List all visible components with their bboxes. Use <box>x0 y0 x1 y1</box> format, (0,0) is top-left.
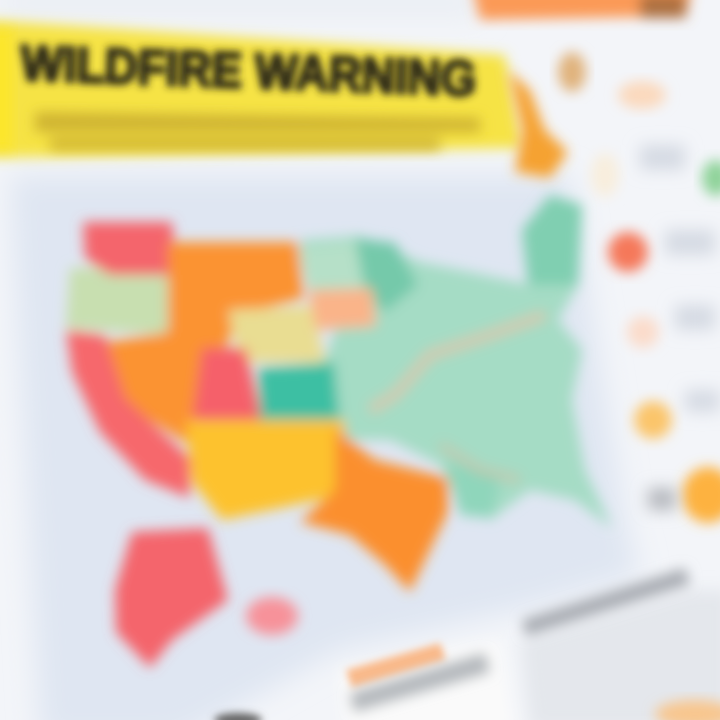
panel orange accent <box>655 700 720 720</box>
legend icon: green <box>702 160 720 196</box>
banner corner ribbon <box>508 70 568 178</box>
legend labels <box>640 145 720 510</box>
Texas <box>300 428 448 592</box>
eastern states base <box>300 195 612 528</box>
route line along the south <box>440 445 520 480</box>
Oregon <box>66 268 172 335</box>
card background <box>340 640 515 720</box>
northern plains light <box>298 243 365 292</box>
top orange banner <box>472 0 692 20</box>
Dakota patch <box>308 288 376 330</box>
Washington <box>83 222 178 275</box>
map of the United States <box>66 195 612 592</box>
Colorado <box>192 348 262 422</box>
bottom center card <box>340 640 515 720</box>
Kansas <box>258 362 340 425</box>
Idaho and Montana <box>168 242 304 360</box>
bottom right panel <box>520 568 720 720</box>
Nevada and Utah <box>105 332 225 445</box>
Alaska <box>115 528 228 668</box>
legend icon: orange <box>682 467 720 523</box>
banner edge highlight <box>0 30 12 150</box>
legend icon: peach <box>618 81 666 109</box>
northeast accent <box>522 195 582 285</box>
Hawaii <box>246 597 298 635</box>
legend icon: amber <box>634 401 672 439</box>
bottom dark mark <box>214 713 262 720</box>
California <box>66 330 190 498</box>
legend icon: top tan <box>558 52 586 92</box>
banner background <box>0 20 522 158</box>
subtitle <box>35 112 480 150</box>
panel heading <box>522 568 690 636</box>
route line across the east <box>370 315 545 410</box>
gulf states <box>445 460 500 518</box>
legend icon: pale yellow <box>591 153 619 197</box>
title: WILDFIRE WARNING <box>20 35 477 107</box>
Arizona and New Mexico <box>186 420 345 520</box>
legend column <box>558 52 720 523</box>
upper midwest accent <box>355 238 418 312</box>
legend icon: pale peach <box>627 316 659 348</box>
Wyoming <box>228 306 325 362</box>
legend icon: red orange <box>608 232 648 272</box>
card heading <box>346 643 446 688</box>
card text <box>350 653 490 712</box>
title banner <box>0 20 568 178</box>
panel background <box>520 590 720 720</box>
